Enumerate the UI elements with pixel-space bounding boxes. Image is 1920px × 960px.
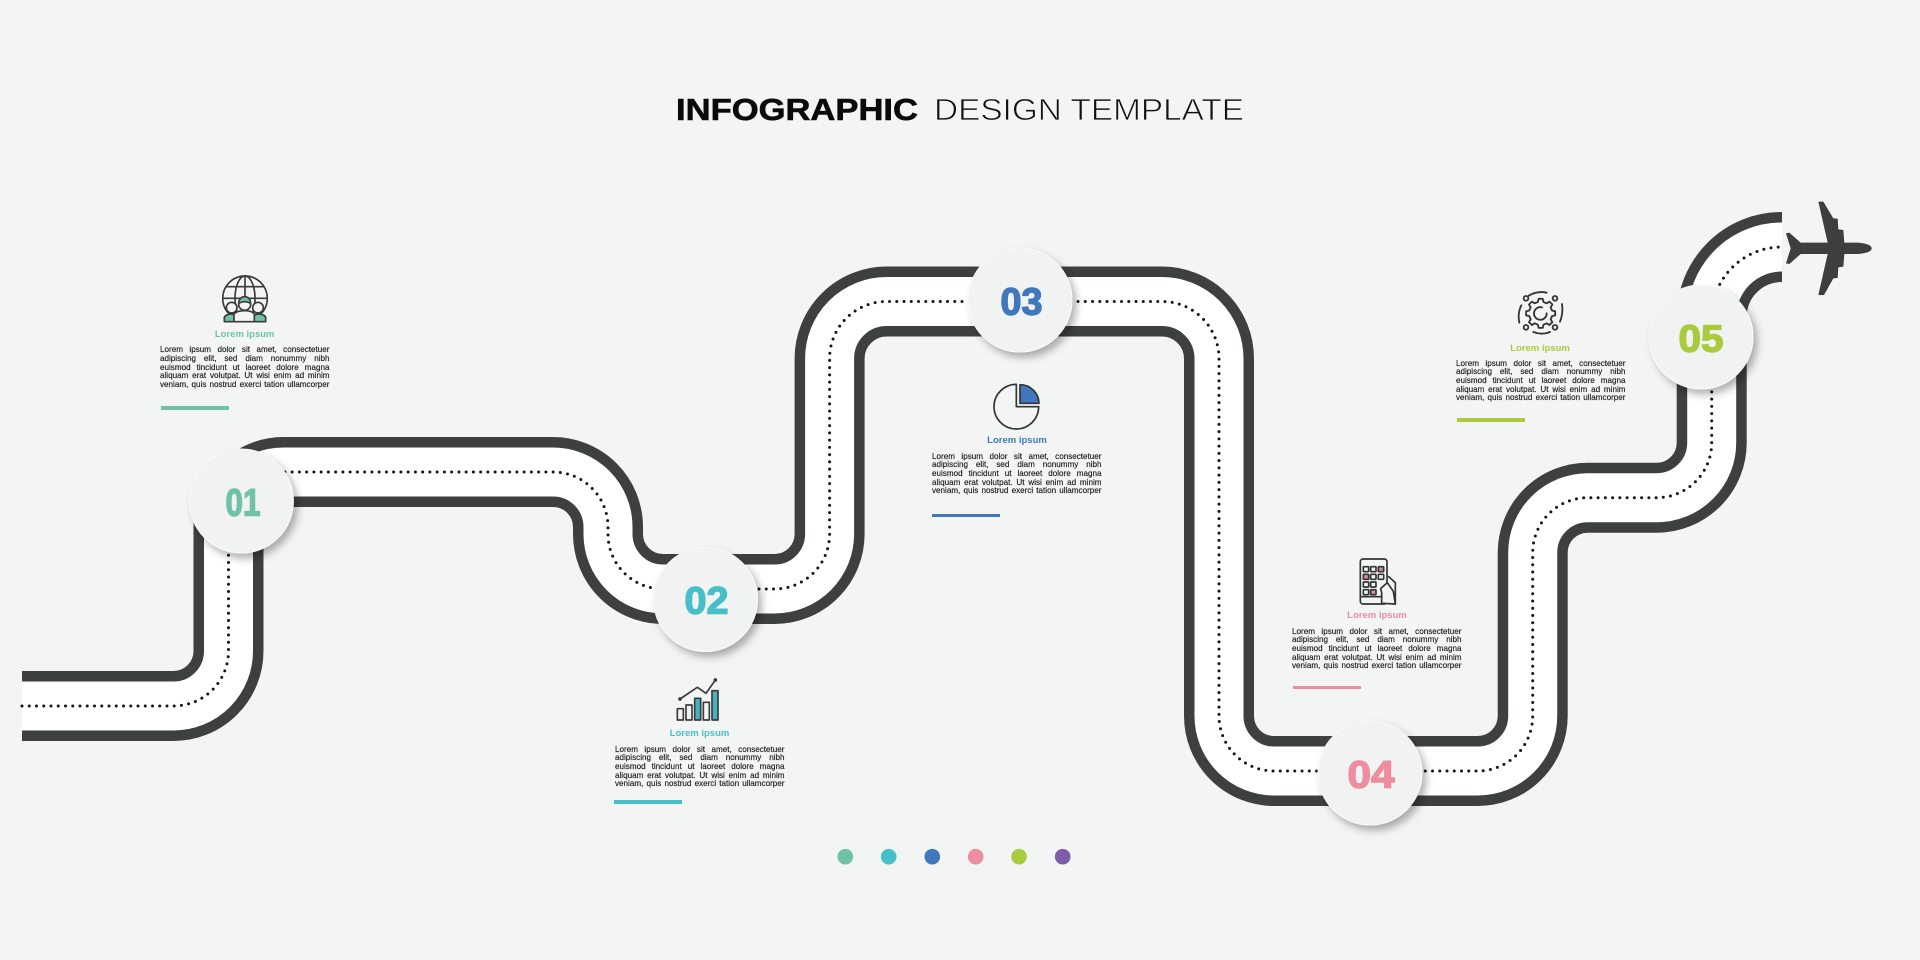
body text <box>1292 627 1462 670</box>
panel: step 5 <box>1456 291 1626 422</box>
body text: Lorem ipsum dolor sit amet, consectetuer <box>932 452 1102 461</box>
body text: veniam, quis nostrud exerci tation ullamcorper <box>1456 393 1626 402</box>
heading: Lorem ipsum <box>1510 343 1570 354</box>
accent bar <box>614 800 682 804</box>
accent bar <box>932 514 1000 517</box>
heading: Lorem ipsum <box>670 728 729 739</box>
icon: smartphone in hand <box>1359 558 1396 605</box>
heading: Lorem ipsum <box>1347 610 1407 621</box>
title <box>676 92 1244 127</box>
step marker 02 <box>654 548 758 652</box>
body text: veniam, quis nostrud exerci tation ullamcorper <box>160 380 330 389</box>
icon: airplane <box>1786 202 1872 295</box>
step marker 03: 03 <box>1000 282 1042 324</box>
body text: Lorem ipsum dolor sit amet, consectetuer <box>160 345 330 354</box>
body text: adipiscing elit, sed diam nonummy nibh <box>1292 635 1462 644</box>
title: INFOGRAPHIC <box>676 92 918 127</box>
panel: step 2 <box>614 678 785 804</box>
body text: euismod tincidunt ut laoreet dolore magna <box>1456 376 1626 385</box>
step marker 05: 05 <box>1678 318 1724 360</box>
body text <box>615 745 785 788</box>
accent bar <box>1293 686 1361 689</box>
body text: adipiscing elit, sed diam nonummy nibh <box>615 753 784 762</box>
body text: aliquam erat volutpat. Ut wisi enim ad minim <box>932 478 1102 487</box>
body text <box>1456 359 1626 402</box>
body text: veniam, quis nostrud exerci tation ullamcorper <box>615 779 784 788</box>
body text: Lorem ipsum dolor sit amet, consectetuer <box>1456 359 1626 368</box>
body text: aliquam erat volutpat. Ut wisi enim ad minim <box>160 371 330 380</box>
step marker 04 <box>1318 721 1422 825</box>
panel: step 1 <box>160 275 330 410</box>
body text: aliquam erat volutpat. Ut wisi enim ad minim <box>1456 385 1626 394</box>
icon: pie chart <box>993 384 1040 430</box>
body text: adipiscing elit, sed diam nonummy nibh <box>160 354 330 363</box>
body text <box>932 452 1102 495</box>
step marker 04: 04 <box>1348 754 1394 796</box>
body text: euismod tincidunt ut laoreet dolore magna <box>615 762 784 771</box>
body text: adipiscing elit, sed diam nonummy nibh <box>1456 367 1626 376</box>
heading: Lorem ipsum <box>987 435 1047 446</box>
body text: veniam, quis nostrud exerci tation ullamcorper <box>1292 661 1462 670</box>
body text: euismod tincidunt ut laoreet dolore magna <box>160 363 330 372</box>
step marker 01: 01 <box>226 482 260 524</box>
panel: step 4 <box>1292 558 1462 689</box>
body text: aliquam erat volutpat. Ut wisi enim ad minim <box>1292 653 1462 662</box>
body text: aliquam erat volutpat. Ut wisi enim ad minim <box>615 771 784 780</box>
body text: adipiscing elit, sed diam nonummy nibh <box>932 460 1102 469</box>
heading: Lorem ipsum <box>215 329 275 340</box>
icon: bar chart with trend line <box>676 678 719 721</box>
title: DESIGN TEMPLATE <box>934 92 1244 127</box>
accent bar <box>1457 418 1525 422</box>
winding road <box>22 247 1782 771</box>
body text: Lorem ipsum dolor sit amet, consectetuer <box>615 745 784 754</box>
body text: veniam, quis nostrud exerci tation ullamcorper <box>932 486 1102 495</box>
step marker 01 <box>189 449 293 553</box>
step marker 02: 02 <box>684 580 728 622</box>
body text: euismod tincidunt ut laoreet dolore magna <box>1292 644 1462 653</box>
accent bar <box>161 406 229 410</box>
icon: globe with people <box>222 275 268 322</box>
panel: step 3 <box>932 384 1102 517</box>
icon: gear with orbit <box>1518 291 1564 335</box>
body text <box>160 345 330 389</box>
step marker 05 <box>1649 285 1753 389</box>
step marker 03 <box>968 248 1072 352</box>
body text: Lorem ipsum dolor sit amet, consectetuer <box>1292 627 1462 636</box>
colour legend dots <box>838 849 1070 864</box>
body text: euismod tincidunt ut laoreet dolore magna <box>932 469 1102 478</box>
